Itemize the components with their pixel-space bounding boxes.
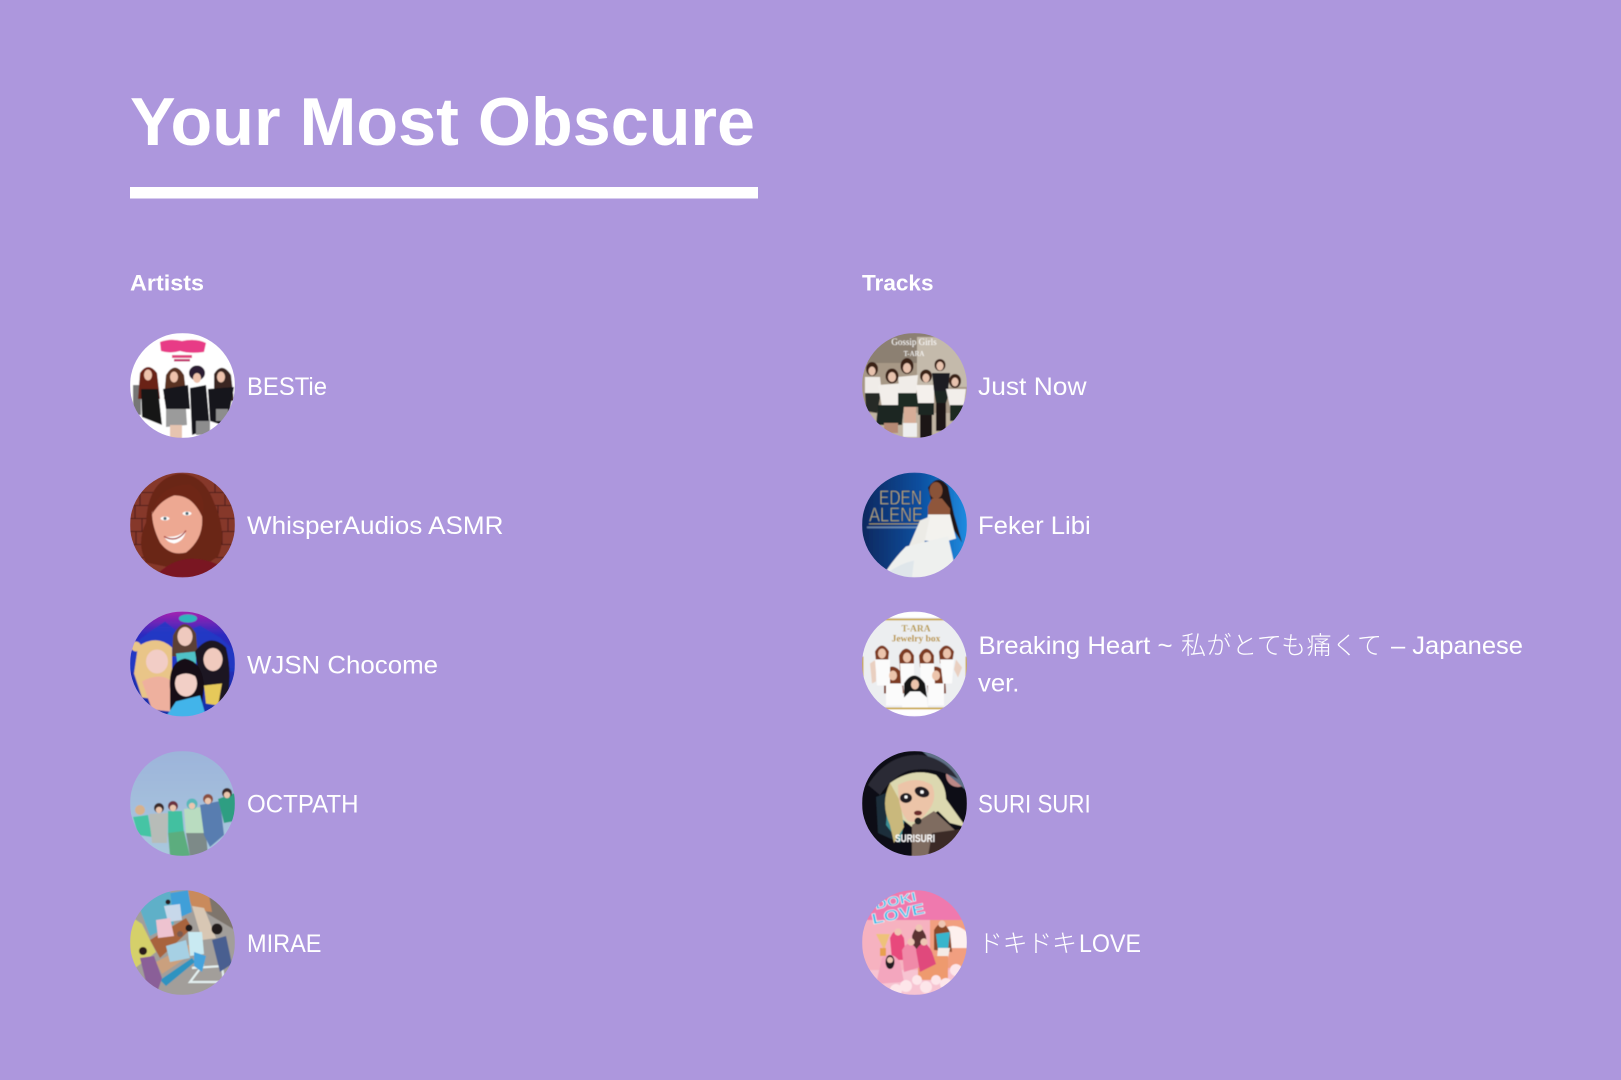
album art: Feker Libi: ALENE: [869, 504, 923, 526]
artist row: WhisperAudios ASMR: [130, 472, 504, 578]
artist row: WJSN Chocome: [130, 612, 438, 716]
album art: SURI SURI: SURISURI: [895, 833, 935, 845]
track name: Breaking Heart, first line: – Japanese: [1391, 632, 1523, 660]
album art: Feker Libi: EDEN: [879, 488, 922, 510]
album art: SURI SURI: [862, 751, 970, 856]
track name: SURI SURI: SURI SURI: [978, 790, 1091, 818]
title: Your Most Obscure: [130, 84, 755, 160]
artist image: WhisperAudios ASMR: [130, 472, 235, 578]
album art: Feker Libi: [862, 472, 967, 578]
artist image: WJSN Chocome: [130, 612, 235, 716]
artist row: MIRAE: [130, 890, 322, 995]
track name: ドキドキLOVE: LOVE: [1079, 930, 1141, 958]
track row: SURI SURI: [862, 751, 1091, 856]
track name: Just Now: Just Now: [978, 373, 1087, 401]
artist row: OCTPATH: [130, 751, 358, 856]
heading: tracks: Tracks: [862, 271, 934, 296]
album art: ドキドキLOVE: [862, 888, 967, 996]
track name: ドキドキLOVE: [978, 924, 1141, 960]
album art: Just Now: Gossip Girls: [891, 337, 937, 347]
artist name: WJSN Chocome: WJSN Chocome: [247, 652, 438, 680]
artist name: OCTPATH: OCTPATH: [247, 790, 358, 818]
track row: ドキドキLOVE: [862, 888, 1141, 996]
track row: Just Now: [862, 333, 1087, 438]
artist image: MIRAE: [130, 890, 235, 995]
track name: Breaking Heart, first line: [978, 626, 1523, 662]
artist name: WhisperAudios ASMR: WhisperAudios ASMR: [247, 512, 504, 540]
album art: Breaking Heart: [862, 612, 967, 716]
title underline: [130, 187, 758, 198]
artist image: BESTie: [130, 333, 235, 438]
heading: artists: Artists: [130, 271, 204, 296]
artist image: OCTPATH: [130, 751, 235, 856]
track row: Feker Libi: [862, 472, 1091, 578]
track name: ドキドキLOVE: ドキドキ: [978, 924, 1077, 960]
track name: Feker Libi: Feker Libi: [978, 512, 1091, 540]
album art: Just Now: T-ARA: [904, 350, 924, 358]
track name: Breaking Heart, first line: 私がとても痛くて: [1181, 626, 1382, 662]
track name: Breaking Heart, first line: Breaking Heart ~: [978, 632, 1172, 660]
track row: Breaking Heart: [862, 612, 1523, 716]
artist name: MIRAE: MIRAE: [247, 930, 322, 958]
artist row: BESTie: [130, 333, 327, 438]
artist name: BESTie: BESTie: [247, 373, 327, 401]
album art: Breaking Heart: Jewelry box: [892, 634, 941, 644]
album art: ドキドキLOVE: LOVE: [870, 900, 927, 928]
album art: ドキドキLOVE: DOKI: [873, 889, 918, 912]
album art: Just Now: [862, 333, 967, 438]
album art: Breaking Heart: T-ARA: [901, 624, 931, 634]
track name: Breaking Heart, second line: ver.: [978, 670, 1019, 698]
